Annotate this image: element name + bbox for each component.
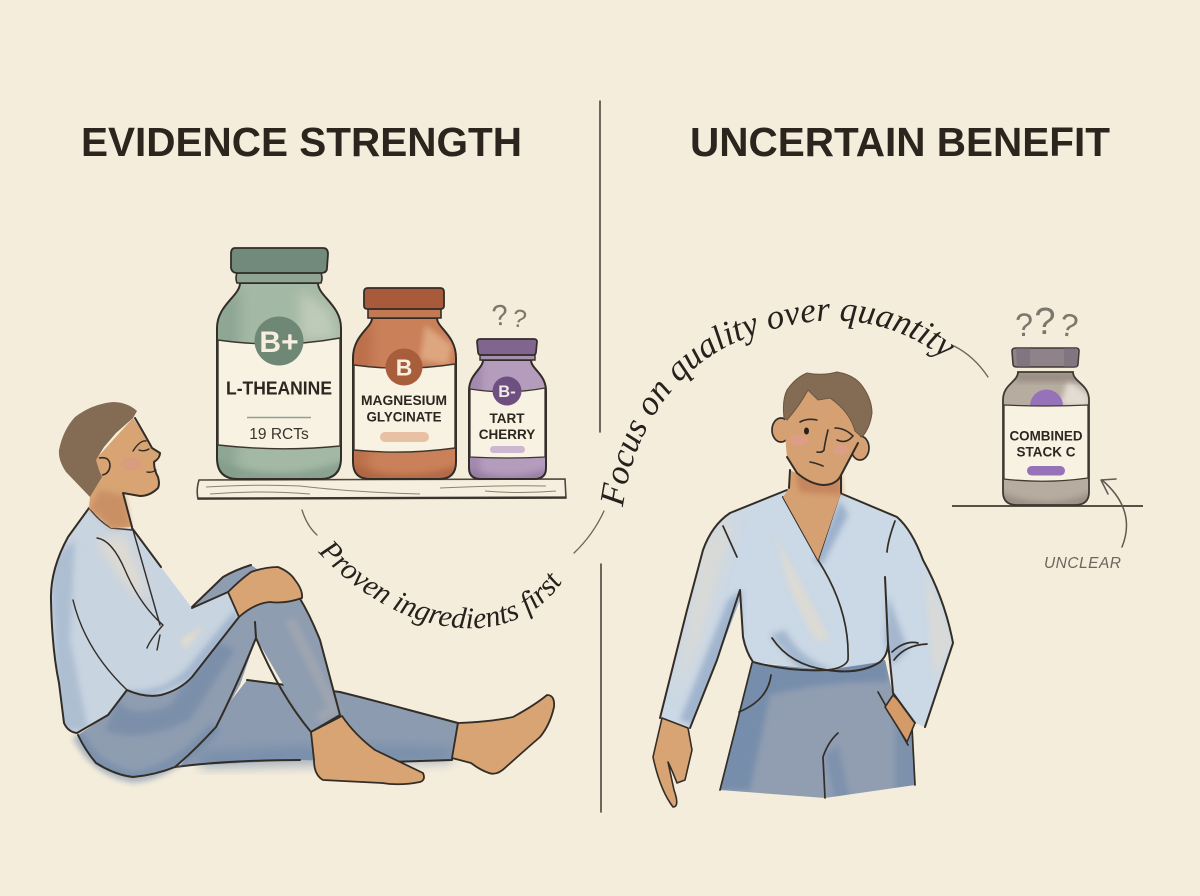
text: L-theanine: L-THEANINE <box>226 378 332 398</box>
question marks: stack bottle: ? <box>1015 307 1033 343</box>
neck <box>783 470 842 560</box>
hair <box>783 372 872 437</box>
question marks: tart cherry: ? <box>510 304 529 334</box>
hair <box>59 402 137 497</box>
text: tart cherry <box>479 411 535 442</box>
shelf <box>197 479 566 499</box>
label: magnesium <box>354 364 455 452</box>
bottle: combined stack C <box>1000 348 1092 508</box>
question marks: stack bottle: ? <box>1057 306 1081 344</box>
left hand <box>653 718 692 807</box>
question marks: stack bottle: ? <box>1034 301 1056 343</box>
badge: B+ grade: B+ <box>259 326 299 359</box>
bottle: magnesium glycinate <box>345 288 458 485</box>
question marks: stack bottle <box>1015 301 1081 344</box>
cheek blush <box>121 457 141 471</box>
curved connector left of script <box>302 510 317 535</box>
bottle: tart cherry <box>462 339 548 482</box>
neck and face <box>89 418 160 528</box>
far leg <box>175 680 458 768</box>
badge: B grade <box>386 348 422 386</box>
text: magnesium glycinate <box>361 393 447 424</box>
person: standing, uncertain <box>653 372 953 807</box>
ear left <box>772 418 790 442</box>
text: magnesium glycinate: GLYCINATE <box>366 410 442 424</box>
text: magnesium glycinate: MAGNESIUM <box>361 393 447 408</box>
ear <box>99 458 110 475</box>
heading: evidence strength: EVIDENCE STRENGTH <box>81 119 522 165</box>
pants <box>715 655 920 800</box>
pocket hand <box>885 695 917 742</box>
script text: focus on quality over quantity: Focus on quality over quantity <box>600 304 954 508</box>
blush <box>790 434 808 446</box>
near foot <box>311 716 424 784</box>
curved connector to center <box>574 511 604 553</box>
question marks: tart cherry <box>490 299 529 334</box>
eyes, brow, nose, mouth <box>800 419 853 466</box>
ear right <box>851 436 869 460</box>
text: combined stack C: STACK C <box>1016 444 1076 460</box>
far foot <box>452 695 554 774</box>
hand on knee <box>228 567 302 617</box>
text: 19 RCTs: 19 RCTs <box>249 426 309 443</box>
face <box>785 390 862 485</box>
text: tart cherry: TART <box>490 411 525 426</box>
heading: uncertain benefit: UNCERTAIN BENEFIT <box>690 119 1110 165</box>
badge: B+ grade <box>254 316 304 366</box>
script text: proven ingredients first: Proven ingredients first <box>318 540 562 628</box>
infographic canvas <box>50 100 1143 813</box>
eye and mouth <box>133 441 156 472</box>
text: unclear: UNCLEAR <box>1044 555 1121 572</box>
badge: B grade: B <box>396 354 412 380</box>
person: seated, content <box>50 402 554 784</box>
label: tart cherry <box>470 388 545 458</box>
label: combined <box>1004 405 1088 481</box>
blouse <box>660 490 953 728</box>
arrow: unclear to bottle <box>1101 479 1126 547</box>
sweater <box>50 508 239 733</box>
curved connector to stack bottle <box>954 346 988 377</box>
hips and near leg <box>78 565 340 777</box>
badge: B- grade <box>492 376 522 406</box>
text: combined stack C <box>1010 428 1083 460</box>
question marks: tart cherry: ? <box>490 299 510 333</box>
purple badge, half hidden <box>1030 390 1063 406</box>
text: tart cherry: CHERRY <box>479 427 535 442</box>
badge: B- grade: B- <box>498 383 516 401</box>
bottle: L-theanine <box>216 247 342 480</box>
center divider <box>600 101 601 812</box>
stand line for stack bottle <box>952 505 1143 507</box>
text: combined stack C: COMBINED <box>1010 428 1083 444</box>
label: L-theanine <box>218 338 340 449</box>
